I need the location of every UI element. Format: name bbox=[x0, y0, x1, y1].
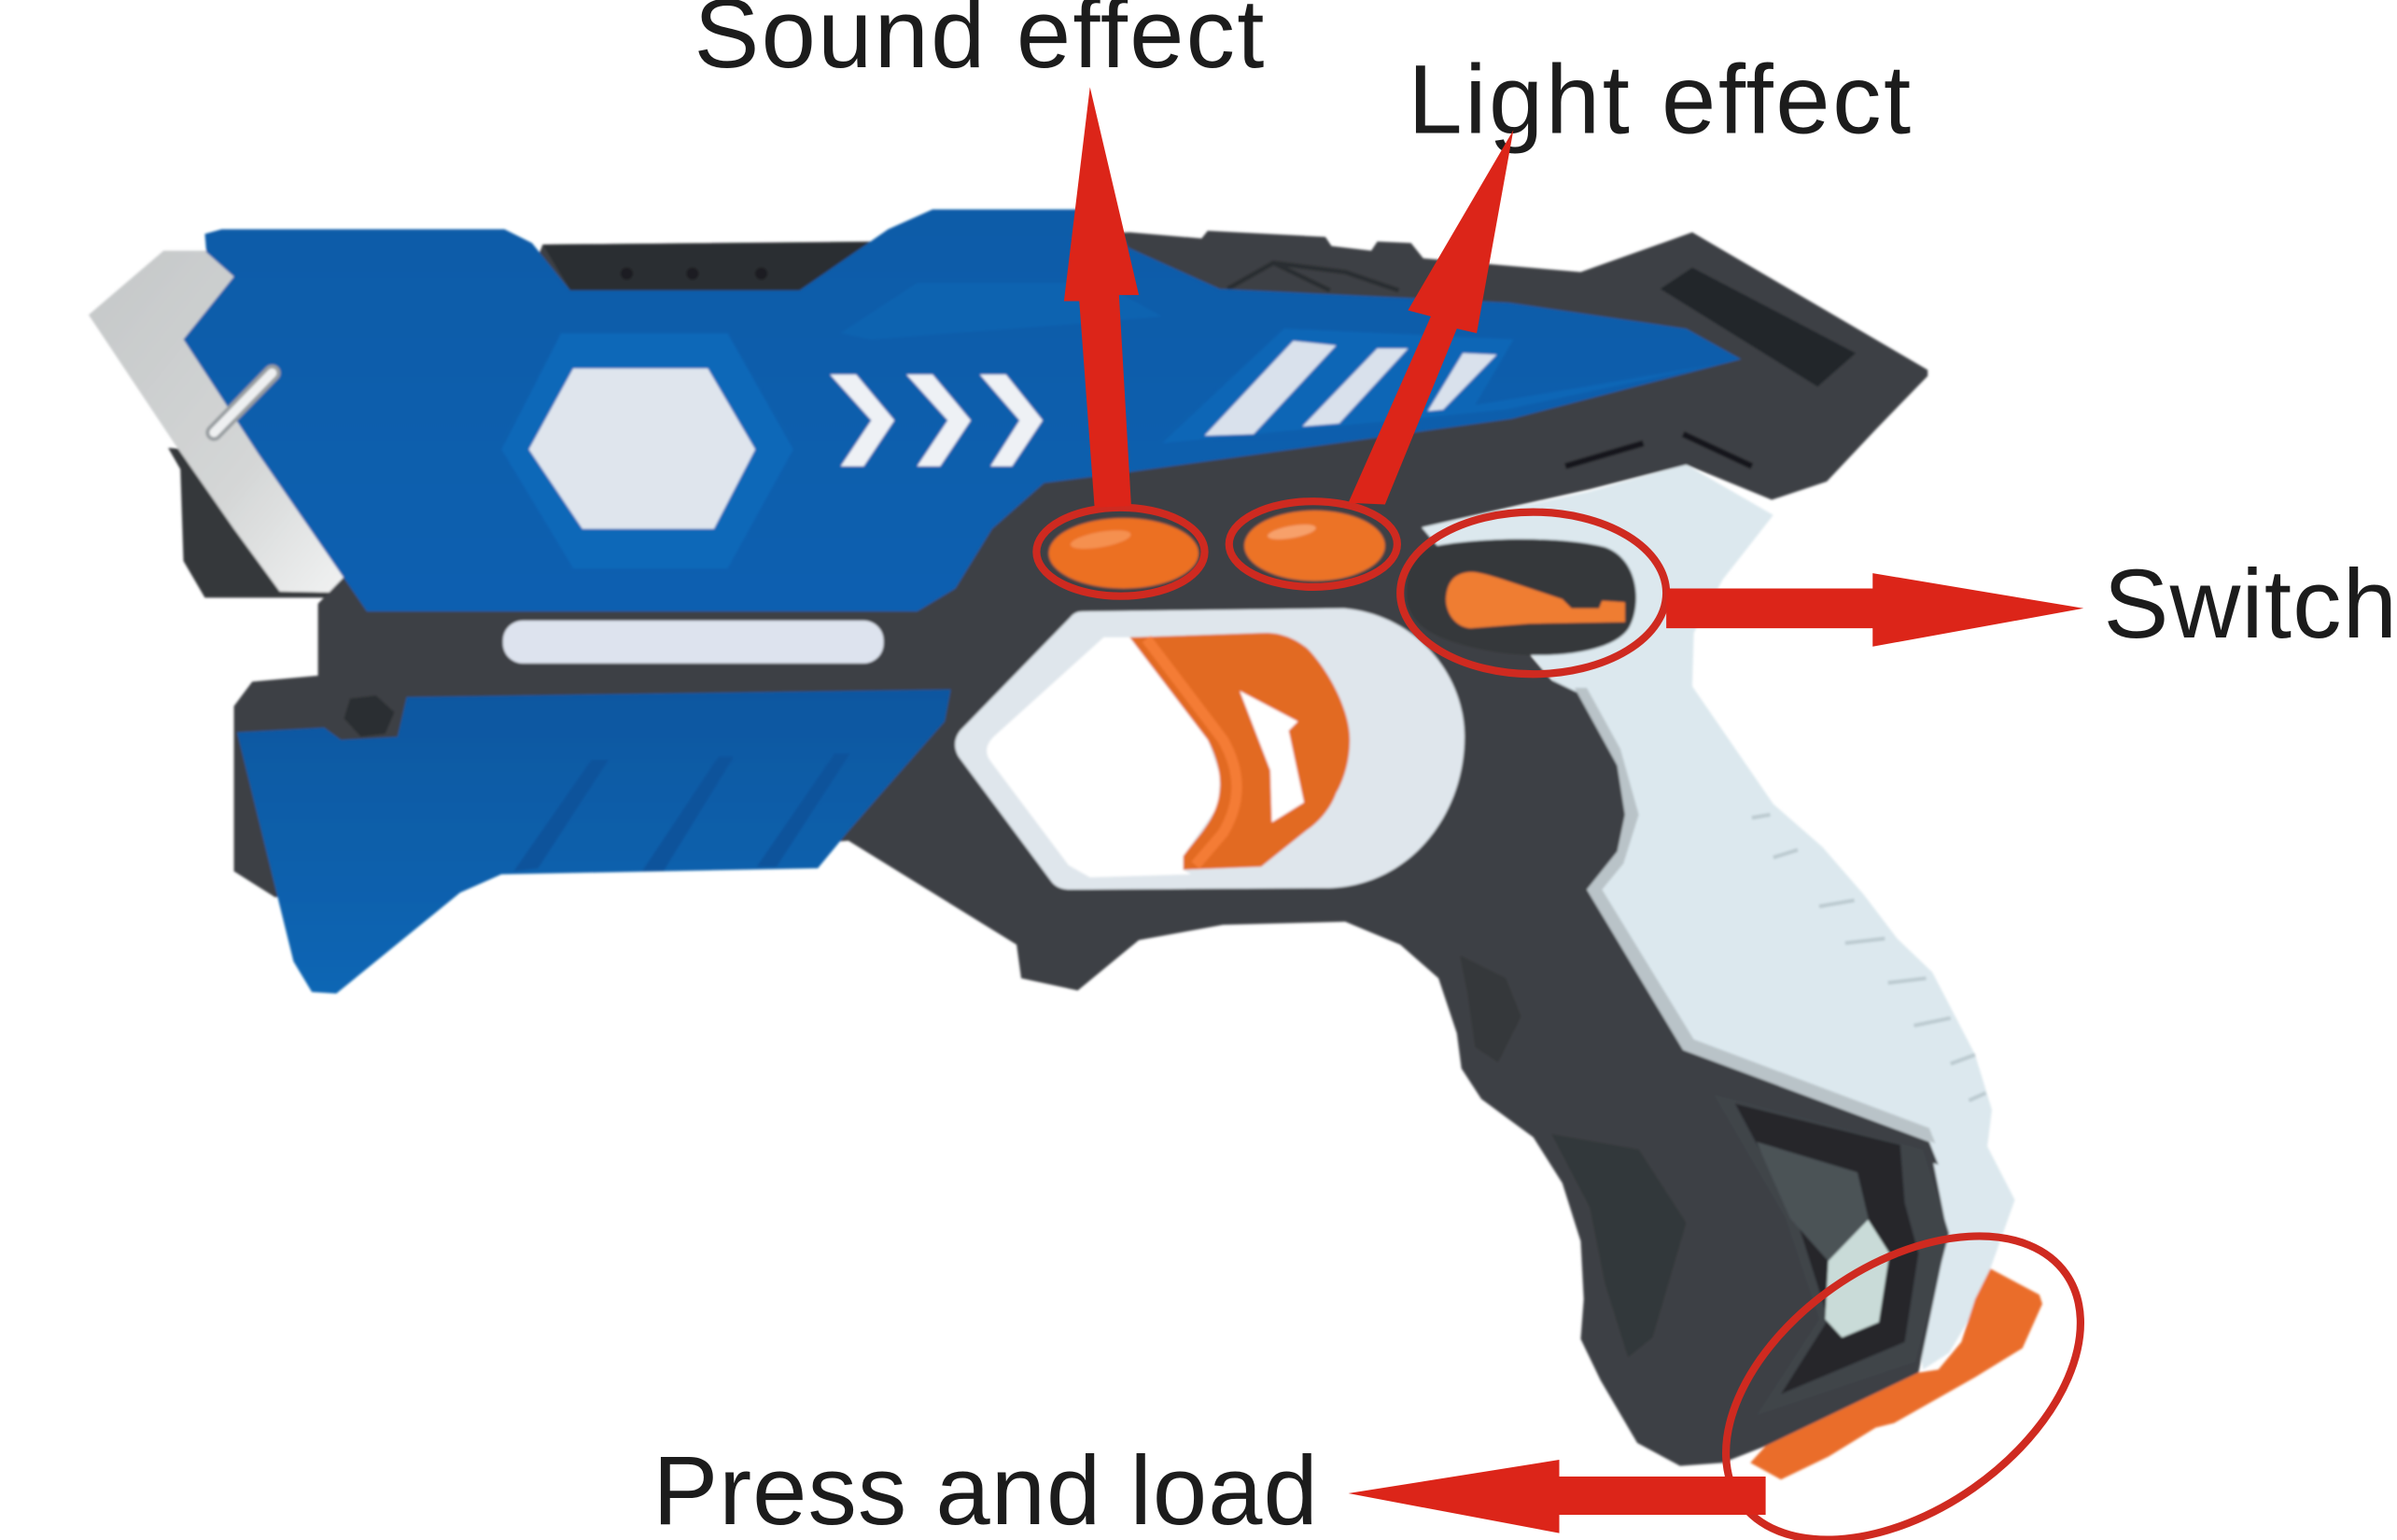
switch housing bbox=[1407, 539, 1636, 655]
silver muzzle plate bbox=[89, 251, 367, 593]
trigger highlight bbox=[1146, 639, 1237, 865]
slot pin highlight bbox=[214, 373, 273, 432]
hex screw bbox=[343, 695, 395, 736]
vents bbox=[1565, 434, 1752, 467]
orange load tab bbox=[1750, 1268, 2042, 1479]
trigger hole bbox=[987, 637, 1220, 877]
dark body bbox=[234, 231, 1947, 1466]
sound button bbox=[1049, 518, 1198, 589]
grip upper recess bbox=[1460, 956, 1521, 1062]
callout ring: press and load bbox=[1670, 1174, 2137, 1540]
trigger bbox=[1129, 633, 1350, 870]
grip border band bbox=[1572, 889, 1939, 1165]
rear sight slot bbox=[1661, 268, 1856, 386]
grip window dark bbox=[1735, 1103, 1918, 1394]
blue raised panel bbox=[841, 283, 1162, 340]
label: light effect: Light effect bbox=[1408, 45, 1911, 154]
chevrons bbox=[830, 374, 1043, 467]
sound button shine bbox=[1070, 526, 1132, 553]
blue front raised panel bbox=[1162, 329, 1719, 443]
trigger cut-out bbox=[1240, 691, 1304, 822]
callout ring: sound button bbox=[1036, 508, 1205, 596]
hexagon light bbox=[529, 369, 755, 529]
light button shine bbox=[1267, 522, 1317, 542]
arrow: to press and load bbox=[1348, 1460, 1766, 1533]
rail dots bbox=[621, 268, 767, 280]
grip glass bbox=[1825, 1220, 1889, 1337]
lower blue shell bbox=[237, 690, 951, 994]
slot pin bbox=[214, 373, 273, 432]
callout ring: light button bbox=[1229, 501, 1397, 587]
gun illustration bbox=[89, 209, 2042, 1479]
trigger guard bbox=[955, 609, 1465, 889]
slashes bbox=[1205, 341, 1496, 436]
upper blue shell bbox=[184, 209, 1741, 611]
grip ridges bbox=[1752, 815, 1985, 1100]
grey grip trim bbox=[1575, 688, 1935, 1143]
white grip bbox=[1422, 465, 2015, 1369]
grip window frame bbox=[1714, 1095, 1949, 1416]
grip window inner panel bbox=[1757, 1141, 1871, 1261]
top rail lattice bbox=[1227, 263, 1399, 290]
grip lower recess bbox=[1551, 1134, 1686, 1357]
top rail dark bbox=[542, 242, 879, 290]
light strip bbox=[503, 621, 884, 664]
arrow: to switch bbox=[1666, 573, 2083, 647]
light button bbox=[1244, 511, 1385, 581]
lower ridges bbox=[513, 753, 850, 871]
callout ring: switch bbox=[1400, 512, 1666, 674]
arrow: to light effect bbox=[1348, 130, 1513, 504]
switch lever bbox=[1446, 572, 1625, 628]
barrel rear dark bbox=[168, 448, 367, 597]
hexagon surround bbox=[501, 333, 793, 568]
label: switch: Switch bbox=[2104, 550, 2397, 659]
arrow: to sound effect bbox=[1064, 87, 1139, 508]
